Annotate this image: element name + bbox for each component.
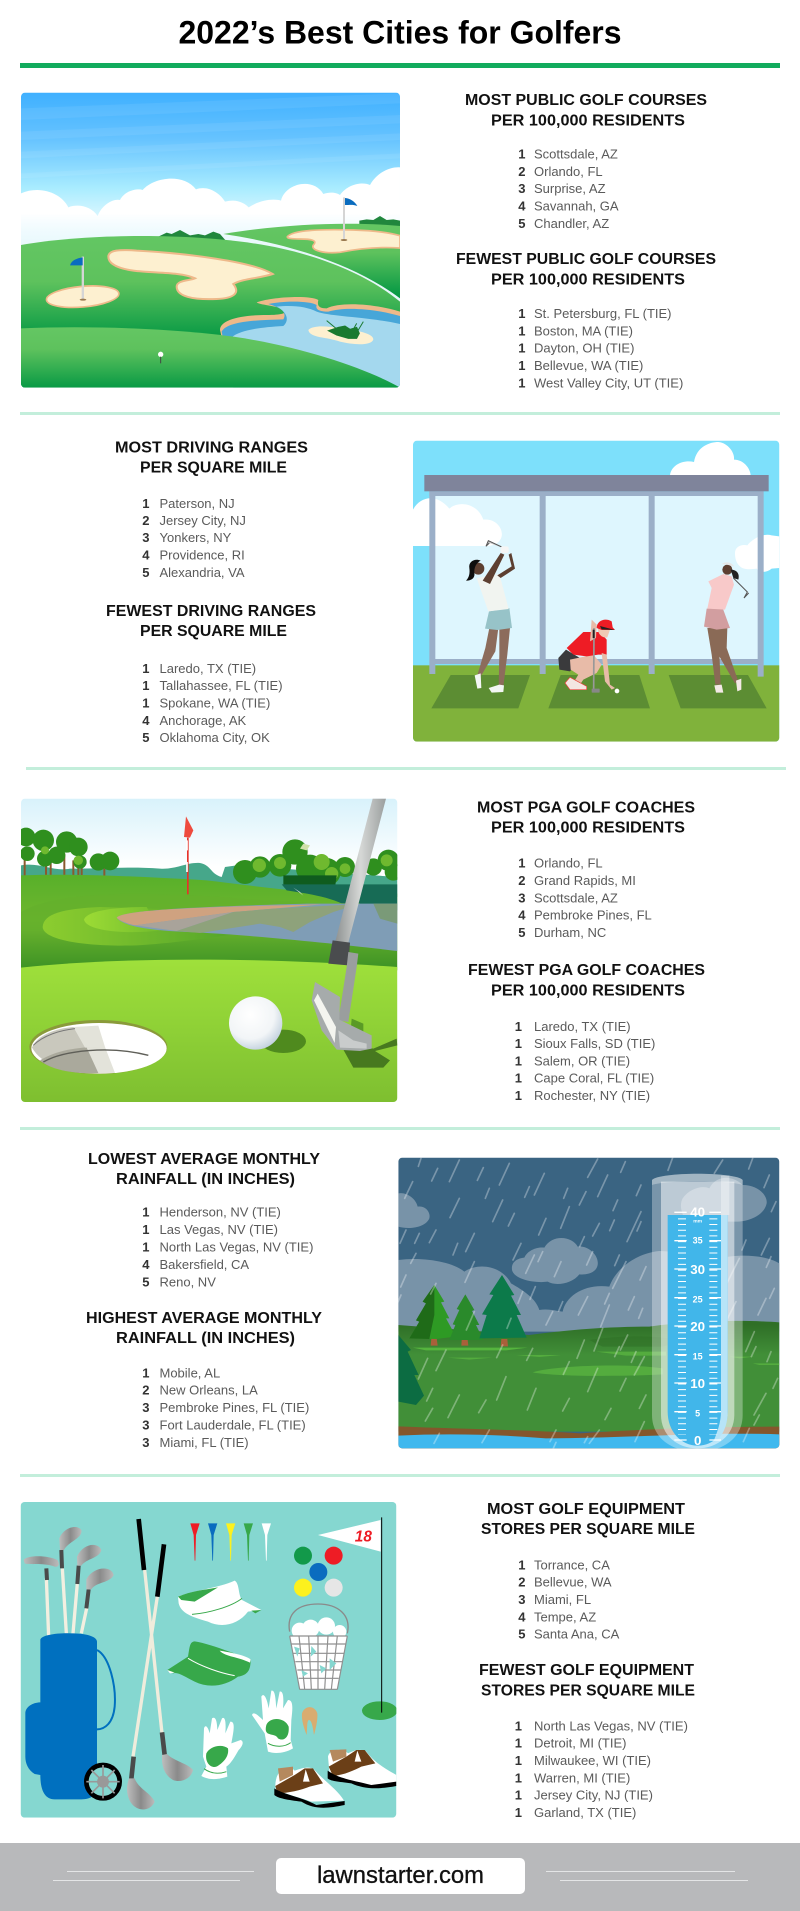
list: most golf equipment stores: Miami, FL xyxy=(534,1592,591,1607)
list: fewest driving ranges: Laredo, TX (TIE) xyxy=(160,661,256,676)
list: fewest golf equipment stores: Detroit, MI (TIE) xyxy=(534,1736,626,1750)
list: fewest PGA golf coaches: Sioux Falls, SD (TIE) xyxy=(534,1036,655,1051)
list: most golf equipment stores: Tempe, AZ xyxy=(534,1610,596,1624)
list: most PGA golf coaches xyxy=(518,856,652,940)
rain gauge: 5 xyxy=(695,1408,700,1418)
list: lowest average monthly rainfall: 1 xyxy=(142,1204,150,1220)
list: fewest driving ranges: 1 xyxy=(142,678,150,693)
rain gauge: 0 xyxy=(694,1433,701,1448)
list: fewest PGA golf coaches: 1 xyxy=(515,1070,522,1086)
list: most driving ranges: 2 xyxy=(142,513,150,528)
heading: highest average monthly rainfall xyxy=(86,1310,322,1347)
heading: most PGA golf coaches: PER 100,000 RESIDENTS xyxy=(491,820,685,836)
list: most golf equipment stores: 4 xyxy=(518,1610,526,1624)
heading: lowest average monthly rainfall: RAINFALL (IN INCHES) xyxy=(116,1171,295,1188)
list: most PGA golf coaches: Scottsdale, AZ xyxy=(534,890,618,906)
list: fewest public golf courses: Boston, MA (TIE) xyxy=(534,324,633,338)
heading: fewest golf equipment stores xyxy=(479,1662,695,1700)
list: fewest driving ranges: Oklahoma City, OK xyxy=(160,730,270,745)
list: highest average monthly rainfall: Miami, FL (TIE) xyxy=(160,1435,249,1450)
gloves xyxy=(201,1691,293,1779)
heading: fewest public golf courses xyxy=(456,251,716,288)
footer xyxy=(0,1843,800,1911)
list: most driving ranges: 4 xyxy=(142,548,150,562)
list: fewest golf equipment stores: 1 xyxy=(515,1753,522,1768)
list: fewest public golf courses: 1 xyxy=(518,306,526,321)
list: lowest average monthly rainfall: Las Vegas, NV (TIE) xyxy=(160,1222,278,1237)
heading: highest average monthly rainfall: HIGHEST AVERAGE MONTHLY xyxy=(86,1310,322,1327)
list: fewest public golf courses: 1 xyxy=(518,324,526,338)
list: highest average monthly rainfall: 3 xyxy=(142,1435,150,1450)
list: fewest PGA golf coaches: Rochester, NY (TIE) xyxy=(534,1088,650,1103)
heading: fewest PGA golf coaches xyxy=(468,962,705,1000)
list: highest average monthly rainfall xyxy=(142,1366,309,1450)
flag with hole 18 xyxy=(318,1517,397,1720)
rain gauge: 25 xyxy=(693,1295,703,1305)
list: lowest average monthly rainfall: Reno, NV xyxy=(160,1274,216,1290)
heading: most golf equipment stores: STORES PER SQUARE MILE xyxy=(481,1521,695,1538)
heading: fewest golf equipment stores: STORES PER SQUARE MILE xyxy=(481,1682,695,1700)
list: most public golf courses xyxy=(518,146,619,231)
heading: fewest PGA golf coaches: PER 100,000 RESIDENTS xyxy=(491,982,685,1000)
heading: fewest golf equipment stores: FEWEST GOLF EQUIPMENT xyxy=(479,1662,694,1679)
illustration: women at a driving range xyxy=(413,441,779,742)
heading: most golf equipment stores xyxy=(481,1501,695,1538)
list: fewest PGA golf coaches: Laredo, TX (TIE) xyxy=(534,1019,631,1034)
list: most public golf courses: Orlando, FL xyxy=(534,164,603,179)
tees xyxy=(190,1523,271,1561)
mats xyxy=(431,675,767,708)
heading: fewest PGA golf coaches: FEWEST PGA GOLF COACHES xyxy=(468,962,705,979)
list: fewest golf equipment stores: Garland, TX (TIE) xyxy=(534,1805,636,1820)
list: fewest PGA golf coaches: 1 xyxy=(515,1054,522,1068)
list: most PGA golf coaches: Grand Rapids, MI xyxy=(534,873,636,888)
list: fewest PGA golf coaches: 1 xyxy=(515,1019,522,1034)
panel: driving ranges xyxy=(106,440,779,745)
list: fewest PGA golf coaches: 1 xyxy=(515,1088,522,1103)
rain gauge: 10 xyxy=(690,1376,705,1391)
trunks xyxy=(24,854,106,876)
list: fewest public golf courses: 1 xyxy=(518,358,526,373)
list: highest average monthly rainfall: Pembroke Pines, FL (TIE) xyxy=(160,1400,309,1415)
list: fewest driving ranges: 5 xyxy=(142,730,150,745)
flag xyxy=(187,838,189,894)
list: fewest golf equipment stores xyxy=(515,1718,688,1820)
visors xyxy=(167,1581,261,1686)
list: fewest driving ranges: 1 xyxy=(142,661,150,676)
list: lowest average monthly rainfall: Bakersfield, CA xyxy=(160,1257,249,1272)
putter xyxy=(312,799,397,1068)
list: most public golf courses: 1 xyxy=(518,146,526,162)
heading: lowest average monthly rainfall: LOWEST AVERAGE MONTHLY xyxy=(88,1151,320,1168)
list: most PGA golf coaches: 2 xyxy=(518,873,526,888)
list: fewest golf equipment stores: 1 xyxy=(515,1805,522,1820)
heading: lowest average monthly rainfall xyxy=(88,1151,320,1188)
heading: most driving ranges xyxy=(115,440,308,476)
heading: fewest driving ranges xyxy=(106,603,316,640)
list: fewest driving ranges: 4 xyxy=(142,713,150,728)
list: highest average monthly rainfall: New Orleans, LA xyxy=(160,1382,258,1398)
list: fewest public golf courses: Bellevue, WA (TIE) xyxy=(534,358,643,373)
list: fewest driving ranges: 1 xyxy=(142,696,150,710)
heading: most public golf courses xyxy=(465,92,707,130)
list: fewest driving ranges: Tallahassee, FL (TIE) xyxy=(160,678,283,693)
list: highest average monthly rainfall: Mobile, AL xyxy=(160,1366,220,1380)
list: fewest PGA golf coaches: 1 xyxy=(515,1036,522,1051)
rain gauge: 15 xyxy=(693,1352,703,1362)
list: most driving ranges: Yonkers, NY xyxy=(160,530,232,545)
rain gauge xyxy=(652,1174,743,1452)
rain gauge: 30 xyxy=(690,1262,705,1277)
rain gauge: mm xyxy=(693,1219,703,1225)
list: fewest public golf courses: 1 xyxy=(518,340,526,356)
list: most public golf courses: 5 xyxy=(518,216,526,231)
list: fewest public golf courses xyxy=(518,306,683,390)
rain gauge: 40 xyxy=(690,1205,705,1220)
list: fewest PGA golf coaches: Cape Coral, FL (TIE) xyxy=(534,1070,654,1086)
list: most golf equipment stores: 3 xyxy=(518,1592,526,1607)
heading: most driving ranges: MOST DRIVING RANGES xyxy=(115,440,308,456)
list: fewest golf equipment stores: Milwaukee, WI (TIE) xyxy=(534,1753,651,1768)
list: fewest public golf courses: Dayton, OH (TIE) xyxy=(534,340,634,356)
list: fewest public golf courses: 1 xyxy=(518,376,526,390)
heading: fewest public golf courses: PER 100,000 RESIDENTS xyxy=(491,272,685,288)
list: most golf equipment stores: 2 xyxy=(518,1574,526,1590)
footer url: lawnstarter.com xyxy=(317,1862,484,1889)
flag with hole 18: 18 xyxy=(355,1528,372,1545)
panel: golf equipment stores xyxy=(21,1501,695,1820)
list: fewest golf equipment stores: 1 xyxy=(515,1788,522,1802)
list: most public golf courses: Savannah, GA xyxy=(534,198,619,214)
crossed clubs xyxy=(127,1519,193,1809)
heading: most public golf courses: PER 100,000 RESIDENTS xyxy=(491,112,685,130)
list: most PGA golf coaches: Durham, NC xyxy=(534,925,606,940)
list: most PGA golf coaches: Orlando, FL xyxy=(534,856,603,870)
list: fewest driving ranges: Anchorage, AK xyxy=(160,713,247,728)
list: fewest driving ranges xyxy=(142,661,283,745)
list: most PGA golf coaches: Pembroke Pines, FL xyxy=(534,908,652,922)
list: most public golf courses: 2 xyxy=(518,164,526,179)
clubs in bag xyxy=(24,1527,114,1637)
hole xyxy=(29,1020,167,1074)
list: most public golf courses: Chandler, AZ xyxy=(534,216,609,231)
list: most public golf courses: 3 xyxy=(518,181,526,196)
illustration: golf course with bunkers and pond xyxy=(21,93,400,388)
list: most golf equipment stores: 1 xyxy=(518,1558,526,1572)
list: lowest average monthly rainfall: Henderson, NV (TIE) xyxy=(160,1204,281,1220)
list: most driving ranges: Providence, RI xyxy=(160,548,245,562)
list: highest average monthly rainfall: 3 xyxy=(142,1418,150,1432)
illustration: rain gauge in a rainy landscape xyxy=(397,1158,779,1452)
list: fewest golf equipment stores: 1 xyxy=(515,1718,522,1734)
list: lowest average monthly rainfall: 5 xyxy=(142,1274,150,1290)
list: most driving ranges: Paterson, NJ xyxy=(160,496,235,511)
gauge ticks xyxy=(682,1218,713,1435)
golfer left xyxy=(466,541,515,693)
bag xyxy=(25,1633,120,1799)
list: lowest average monthly rainfall xyxy=(142,1204,313,1290)
list: most public golf courses: 4 xyxy=(518,198,526,214)
heading: most golf equipment stores: MOST GOLF EQUIPMENT xyxy=(487,1501,685,1518)
heading: most PGA golf coaches xyxy=(477,800,695,836)
heading: most public golf courses: MOST PUBLIC GOLF COURSES xyxy=(465,92,707,109)
list: fewest golf equipment stores: 1 xyxy=(515,1736,522,1750)
list: most PGA golf coaches: 5 xyxy=(518,925,526,940)
list: most driving ranges: Alexandria, VA xyxy=(160,565,245,580)
list: most PGA golf coaches: 1 xyxy=(518,856,526,870)
heading: most driving ranges: PER SQUARE MILE xyxy=(140,460,287,476)
heading: most PGA golf coaches: MOST PGA GOLF COACHES xyxy=(477,800,695,816)
list: lowest average monthly rainfall: 4 xyxy=(142,1257,150,1272)
list: highest average monthly rainfall: 1 xyxy=(142,1366,150,1380)
list: fewest driving ranges: Spokane, WA (TIE) xyxy=(160,696,270,710)
tree canopies xyxy=(17,828,402,886)
golfer center xyxy=(558,620,619,693)
list: most golf equipment stores: Bellevue, WA xyxy=(534,1574,612,1590)
heading: fewest driving ranges: FEWEST DRIVING RANGES xyxy=(106,603,316,620)
list: lowest average monthly rainfall: North Las Vegas, NV (TIE) xyxy=(160,1240,313,1254)
list: fewest public golf courses: St. Petersburg, FL (TIE) xyxy=(534,306,672,321)
list: fewest golf equipment stores: Warren, MI (TIE) xyxy=(534,1770,630,1786)
list: most public golf courses: Surprise, AZ xyxy=(534,181,606,196)
list: fewest PGA golf coaches: Salem, OR (TIE) xyxy=(534,1054,630,1068)
list: lowest average monthly rainfall: 1 xyxy=(142,1240,150,1254)
panel: PGA golf coaches xyxy=(17,799,705,1103)
list: most driving ranges: 3 xyxy=(142,530,150,545)
list: highest average monthly rainfall: Fort Lauderdale, FL (TIE) xyxy=(160,1418,306,1432)
list: fewest public golf courses: West Valley City, UT (TIE) xyxy=(534,376,683,390)
illustration: golf equipment flat lay xyxy=(21,1502,397,1818)
list: most driving ranges: Jersey City, NJ xyxy=(160,513,246,528)
list: fewest golf equipment stores: Jersey City, NJ (TIE) xyxy=(534,1788,653,1802)
list: fewest golf equipment stores: North Las Vegas, NV (TIE) xyxy=(534,1718,688,1734)
list: most PGA golf coaches: 4 xyxy=(518,908,526,922)
rain gauge: 20 xyxy=(690,1319,705,1334)
list: fewest PGA golf coaches xyxy=(515,1019,655,1103)
list: most PGA golf coaches: 3 xyxy=(518,890,526,906)
list: most golf equipment stores xyxy=(518,1558,620,1642)
trees xyxy=(398,1275,527,1405)
panel: public golf courses xyxy=(21,92,716,390)
shore and water xyxy=(398,1426,779,1448)
list: highest average monthly rainfall: 2 xyxy=(142,1382,150,1398)
list: most golf equipment stores: Torrance, CA xyxy=(534,1558,610,1572)
heading: fewest public golf courses: FEWEST PUBLIC GOLF COURSES xyxy=(456,251,716,268)
rain xyxy=(397,1158,778,1448)
heading: highest average monthly rainfall: RAINFALL (IN INCHES) xyxy=(116,1330,295,1347)
clouds xyxy=(398,1178,779,1332)
list: most driving ranges: 5 xyxy=(142,565,150,580)
list: most golf equipment stores: Santa Ana, CA xyxy=(534,1626,620,1642)
panel: monthly rainfall xyxy=(86,1151,779,1452)
colored balls xyxy=(294,1547,343,1597)
list: lowest average monthly rainfall: 1 xyxy=(142,1222,150,1237)
list: highest average monthly rainfall: 3 xyxy=(142,1400,150,1415)
rain gauge: 35 xyxy=(693,1236,703,1246)
shoes xyxy=(274,1749,396,1808)
golfer right xyxy=(704,562,749,693)
title: 2022’s Best Cities for Golfers xyxy=(178,14,622,50)
list: most driving ranges xyxy=(142,496,246,580)
illustration: putter, ball and hole on green xyxy=(17,799,402,1102)
list: fewest golf equipment stores: 1 xyxy=(515,1770,522,1786)
list: most golf equipment stores: 5 xyxy=(518,1626,526,1642)
list: most driving ranges: 1 xyxy=(142,496,150,511)
divot tool xyxy=(302,1707,317,1735)
list: most public golf courses: Scottsdale, AZ xyxy=(534,146,618,162)
basket of balls xyxy=(289,1604,348,1689)
ball xyxy=(229,996,306,1053)
heading: fewest driving ranges: PER SQUARE MILE xyxy=(140,623,287,640)
